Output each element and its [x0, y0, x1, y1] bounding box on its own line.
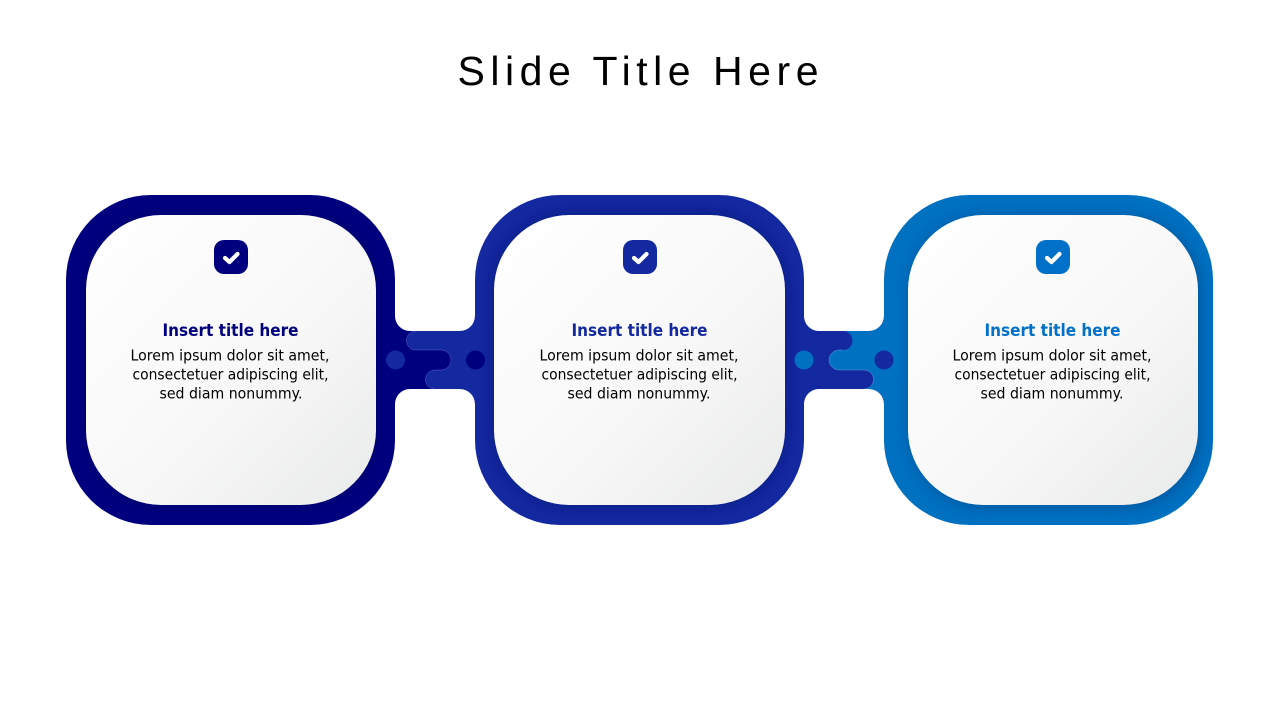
text block 1: sed diam nonummy. — [160, 384, 302, 402]
text block 2: Lorem ipsum dolor sit amet, — [540, 346, 738, 364]
panel: step 2 — [466, 195, 814, 525]
text block 2 — [540, 346, 738, 402]
heading 3: Insert title here — [984, 321, 1120, 341]
connector: first to second — [395, 316, 475, 404]
text block 1: Lorem ipsum dolor sit amet, — [130, 346, 330, 364]
card 2 — [494, 215, 785, 505]
card 1 — [86, 215, 376, 505]
connector dot blue — [794, 350, 814, 370]
connector dot navy — [466, 350, 485, 370]
text block 2: sed diam nonummy. — [568, 384, 710, 402]
title: Slide Title Here — [458, 48, 818, 94]
text block 3: sed diam nonummy. — [980, 384, 1124, 402]
text block 3: Lorem ipsum dolor sit amet, — [952, 346, 1152, 364]
icon: check badge 3 — [1036, 240, 1070, 274]
heading 1: Insert title here — [162, 321, 298, 341]
text block 3 — [952, 346, 1152, 402]
panel: step 1 — [66, 195, 405, 525]
text block 2: consectetuer adipiscing elit, — [542, 366, 738, 384]
heading 2: Insert title here — [572, 321, 708, 341]
icon: check badge 2 — [623, 240, 657, 274]
connector dot left — [386, 350, 405, 370]
text block 3: consectetuer adipiscing elit, — [954, 366, 1150, 384]
icon: check badge 1 — [214, 240, 248, 274]
card 3 — [908, 215, 1198, 505]
text block 1: consectetuer adipiscing elit, — [132, 366, 328, 384]
text block 1 — [130, 346, 330, 402]
connector: second to third — [804, 316, 884, 404]
panel: step 3 — [874, 195, 1213, 525]
connector dot indigo — [874, 350, 894, 370]
